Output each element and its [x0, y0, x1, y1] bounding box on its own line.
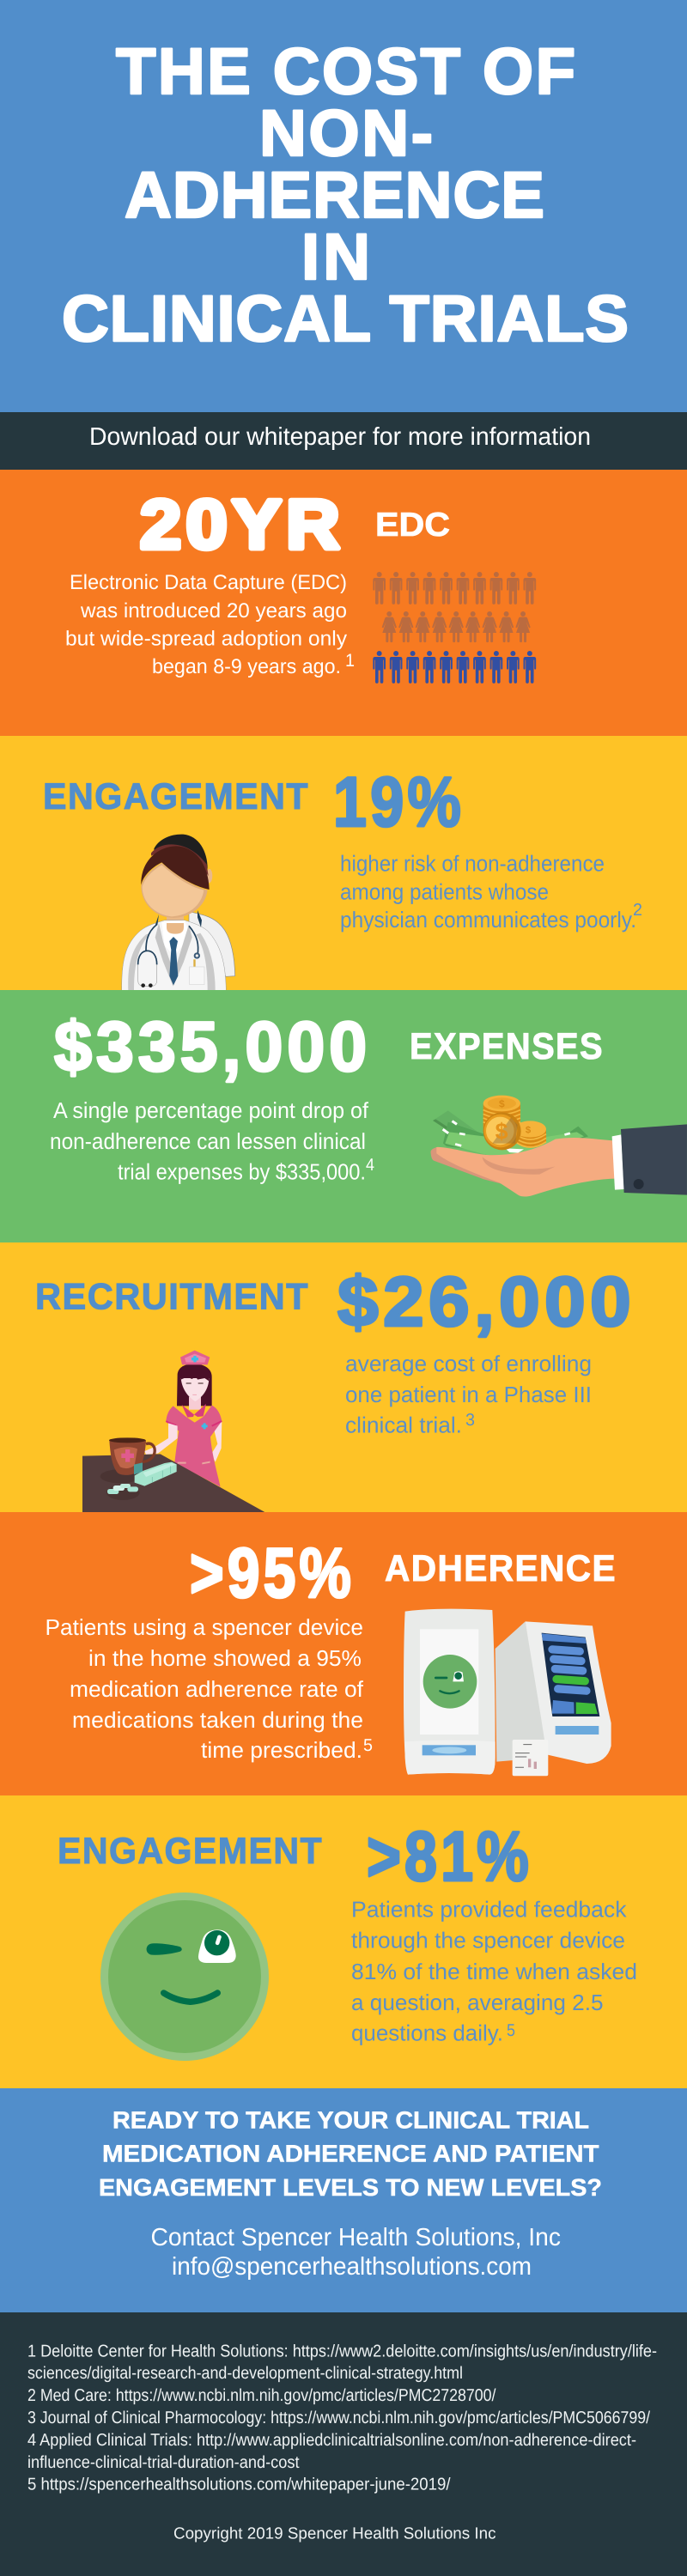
title: THE COST OF	[116, 35, 575, 108]
text: recruitment description: one patient in a Phase III	[345, 1382, 592, 1407]
title: CLINICAL TRIALS	[62, 283, 629, 355]
text: adherence description: medications taken during the	[72, 1707, 363, 1733]
heading: EDC: EDC	[375, 507, 450, 544]
text: 19% description: physician communicates poorly.	[340, 907, 636, 933]
text: EDC description	[65, 571, 355, 678]
title: NON-	[259, 97, 433, 170]
text: engagement description	[351, 1896, 637, 2045]
text: references: 5 https://spencerhealthsolutions.com/whitepaper-june-2019/	[27, 2475, 451, 2494]
title	[62, 35, 629, 355]
text: EDC description: Electronic Data Capture (EDC)	[70, 571, 347, 594]
icon: doctor	[122, 835, 235, 990]
image: spencer device	[404, 1609, 611, 1776]
text: recruitment description	[345, 1351, 592, 1437]
text: EDC description: but wide-spread adoption only	[65, 627, 347, 651]
panel: recruitment	[0, 1242, 687, 1512]
text: references: sciences/digital-research-and-development-clinical-strategy.html	[27, 2364, 463, 2383]
text: expenses description: 4	[366, 1156, 374, 1175]
text: engagement description: 5	[507, 2021, 515, 2040]
text: 19% description: 2	[633, 901, 642, 920]
title: IN	[301, 221, 374, 294]
text: engagement description: Patients provided feedback	[351, 1896, 628, 1922]
icon: hand holding money: $	[499, 1097, 505, 1109]
panel: title banner	[0, 0, 687, 412]
text: expenses description: A single percentage point drop of	[53, 1097, 369, 1123]
heading: engagement: ENGAGEMENT	[58, 1831, 323, 1872]
stat: >81%: >81%	[367, 1818, 532, 1896]
text: engagement description: through the spencer device	[351, 1927, 625, 1953]
panel: engagement 81%	[0, 1795, 687, 2088]
stat: >95%: >95%	[190, 1534, 355, 1613]
icon: hand holding money	[431, 1096, 687, 1197]
text: expenses description: trial expenses by $335,000.	[118, 1159, 366, 1185]
text: EDC description: was introduced 20 years ago	[80, 599, 347, 623]
stat: $26,000: $26,000	[337, 1263, 635, 1341]
heading: expenses: EXPENSES	[410, 1026, 604, 1067]
text: adherence description: in the home showed a 95%	[88, 1645, 362, 1671]
title: ADHERENCE	[125, 159, 544, 232]
text: engagement description: questions daily.	[351, 2020, 503, 2045]
panel: expenses	[0, 990, 687, 1242]
text: references: 2 Med Care: https://www.ncbi.nlm.nih.gov/pmc/articles/PMC2728700/	[27, 2386, 496, 2405]
text: EDC description: began 8-9 years ago.	[152, 655, 341, 678]
text: adherence description: medication adherence rate of	[70, 1676, 364, 1702]
heading: recruitment: RECRUITMENT	[35, 1276, 309, 1317]
icon: hand holding money: $	[495, 1119, 508, 1144]
text: recruitment description: 3	[465, 1411, 475, 1430]
text: engagement description: a question, averaging 2.5	[351, 1990, 603, 2015]
text: 19% description: among patients whose	[340, 879, 549, 905]
text: expenses description: non-adherence can lessen clinical	[50, 1128, 366, 1154]
text: expenses description	[50, 1097, 374, 1185]
text: recruitment description: average cost of enrolling	[345, 1351, 592, 1376]
heading: call to action	[99, 2107, 602, 2201]
icon: nurse at table	[82, 1351, 264, 1512]
stat: $335,000: $335,000	[54, 1008, 371, 1086]
icon: rows of people	[373, 572, 536, 683]
text: adherence description: time prescribed.	[201, 1737, 362, 1763]
panel: references footer	[0, 2312, 687, 2576]
text: adherence description: Patients using a spencer device	[45, 1614, 363, 1640]
text: contact details: Contact Spencer Health Solutions, Inc	[151, 2224, 561, 2251]
panel: engagement 19%	[0, 736, 687, 990]
text: contact details	[151, 2224, 561, 2281]
text: contact details: info@spencerhealthsolutions.com	[172, 2253, 532, 2281]
text: engagement description: 81% of the time when asked	[351, 1959, 637, 1984]
stat: 20YR: 20YR	[140, 486, 344, 563]
icon: hand holding money: $	[526, 1124, 531, 1135]
text: EDC description: 1	[345, 651, 355, 671]
panel: download bar	[0, 412, 687, 470]
text: 19% description: higher risk of non-adherence	[340, 850, 605, 876]
text: adherence description: 5	[363, 1736, 373, 1755]
download text: Download our whitepaper for more information	[89, 423, 591, 451]
panel: adherence	[0, 1512, 687, 1795]
panel: call to action	[0, 2088, 687, 2312]
text: copyright: Copyright 2019 Spencer Health Solutions Inc	[173, 2524, 496, 2543]
heading: engagement: ENGAGEMENT	[43, 776, 309, 817]
text: 19% description	[340, 850, 642, 933]
text: recruitment description: clinical trial.	[345, 1412, 462, 1437]
icon: winking face	[100, 1893, 269, 2061]
panel: EDC	[0, 470, 687, 736]
stat: 19%: 19%	[333, 763, 465, 841]
heading: call to action: READY TO TAKE YOUR CLINICAL TRIAL	[112, 2107, 589, 2133]
text: references: 4 Applied Clinical Trials: http://www.appliedclinicaltrialsonline.com/non-adherence-direct-	[27, 2431, 636, 2450]
text: adherence description	[45, 1614, 373, 1763]
text: references: influence-clinical-trial-duration-and-cost	[27, 2453, 300, 2472]
heading: call to action: ENGAGEMENT LEVELS TO NEW LEVELS?	[99, 2174, 602, 2201]
text: references	[27, 2342, 657, 2494]
heading: call to action: MEDICATION ADHERENCE AND PATIENT	[102, 2140, 599, 2167]
heading: adherence: ADHERENCE	[385, 1548, 617, 1589]
